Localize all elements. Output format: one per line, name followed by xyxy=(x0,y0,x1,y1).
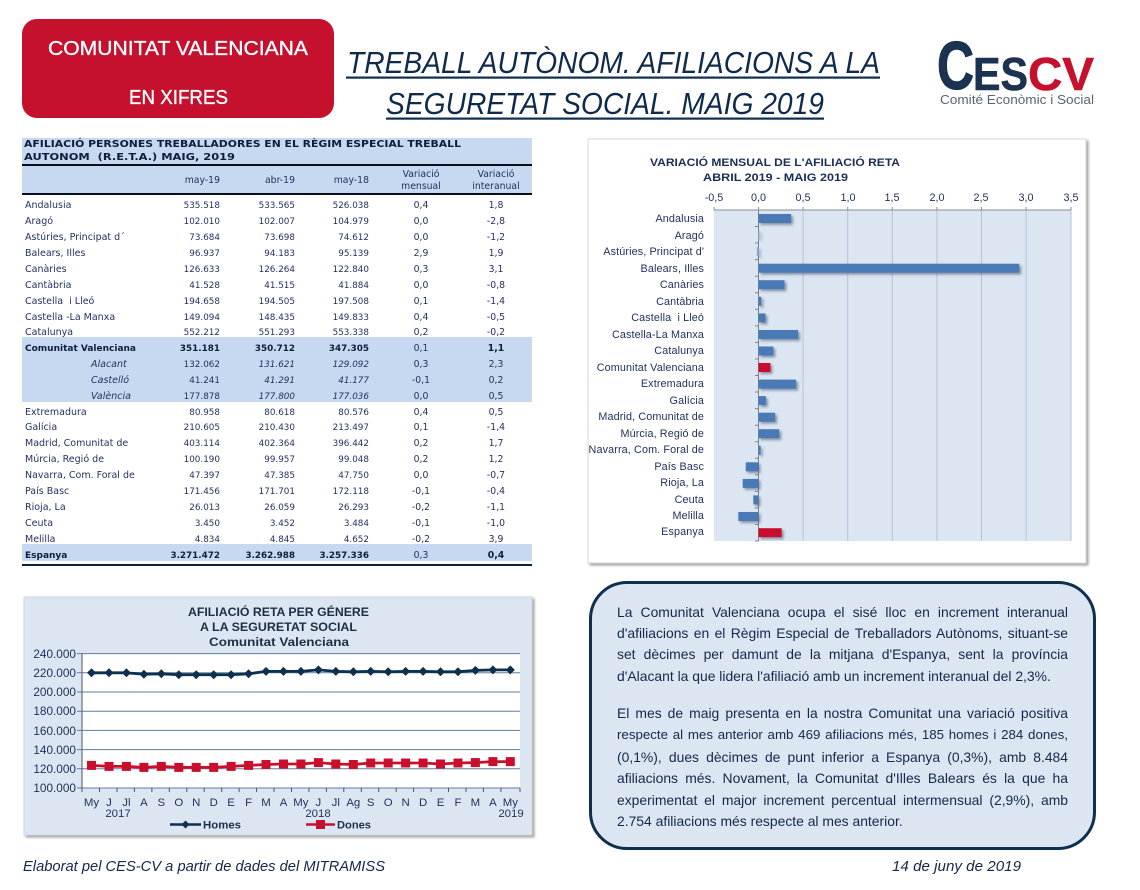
category labels: Madrid, Comunitat de xyxy=(598,411,704,423)
table rows: 171.701 xyxy=(259,487,295,497)
table rows: Aragó xyxy=(25,216,53,227)
table rows: 1,8 xyxy=(489,200,503,211)
x axis labels: Jl xyxy=(122,797,131,809)
highlight band: Espanya xyxy=(22,544,532,561)
table rows: 74.612 xyxy=(338,233,369,243)
text block: paragraph 1: set dècimes per damunt de la mitjana d'Espanya, sent la província xyxy=(617,646,1068,662)
header badge: Comunitat Valenciana en xifres xyxy=(22,19,334,118)
table rows: Ceuta xyxy=(25,518,53,529)
logo: CES-CV: CV xyxy=(1028,48,1094,100)
table rows: 0,0 xyxy=(414,280,428,291)
table rows: 210.430 xyxy=(259,423,295,433)
table rows: 2,3 xyxy=(489,359,503,370)
table rows: 0,0 xyxy=(414,216,428,227)
logo: CES-CV: ES xyxy=(973,48,1028,100)
x axis labels: Ag xyxy=(346,797,360,809)
line chart title xyxy=(188,606,369,649)
table rows: Cantàbria xyxy=(25,280,71,291)
table rows: 403.114 xyxy=(184,439,220,449)
line series: Dones xyxy=(92,762,510,767)
table rows: -1,4 xyxy=(487,296,505,307)
table rows: 194.505 xyxy=(259,297,295,307)
value axis: 2,5 xyxy=(973,192,989,204)
table rows: -0,2 xyxy=(412,502,430,513)
table rows: 3.262.988 xyxy=(245,551,295,561)
table rows: 1,7 xyxy=(489,438,503,449)
table rows: 197.508 xyxy=(333,297,369,307)
table rows: 149.094 xyxy=(184,313,220,323)
table rows: 99.048 xyxy=(338,455,369,465)
table rows: 0,4 xyxy=(488,550,505,561)
x axis labels: E xyxy=(437,797,445,809)
x axis labels: 2018 xyxy=(305,808,331,820)
table rows: 553.338 xyxy=(333,328,369,338)
x axis labels: A xyxy=(280,797,288,809)
table rows: 0,2 xyxy=(414,454,428,465)
value axis xyxy=(705,192,1079,204)
table rows: 210.605 xyxy=(184,423,220,433)
x axis labels: N xyxy=(401,797,410,809)
table rows: 0,3 xyxy=(414,359,428,370)
logo: CES-CV: C xyxy=(937,28,974,104)
table rows: 41.241 xyxy=(189,376,220,386)
table rows: Espanya xyxy=(25,551,67,561)
x axis labels: O xyxy=(174,797,183,809)
table header: may-19 xyxy=(185,175,220,186)
table rows: 3.452 xyxy=(270,519,295,529)
bar chart title: ABRIL 2019 - MAIG 2019 xyxy=(703,172,848,184)
table rows: -0,8 xyxy=(487,280,505,291)
text block: paragraph 1: d'Alacant la que lidera l'afiliació amb un increment interanual del 2,3%. xyxy=(617,668,1051,684)
table rows: 0,0 xyxy=(414,391,428,402)
value axis: 0,5 xyxy=(795,192,811,204)
table rows: 172.118 xyxy=(333,487,369,497)
table rows: 194.658 xyxy=(184,297,220,307)
legend: Dones xyxy=(337,820,371,832)
category labels: Catalunya xyxy=(654,345,704,357)
category labels: Espanya xyxy=(661,526,704,538)
x axis labels: M xyxy=(471,797,480,809)
y axis labels: 240.000 xyxy=(33,647,76,661)
table rows: Catalunya xyxy=(25,327,73,338)
table rows: València xyxy=(91,391,131,402)
x axis labels: F xyxy=(245,797,252,809)
table rows: Castelló xyxy=(91,375,129,386)
x axis labels xyxy=(84,797,524,820)
table rows: 100.190 xyxy=(184,455,220,465)
x axis labels: My xyxy=(293,797,309,809)
x axis labels: M xyxy=(261,797,271,809)
table title: AFILIACIÓ PERSONES TREBALLADORES EN EL RÈGIM ESPECIAL TREBALL xyxy=(24,137,461,150)
table header: abr-19 xyxy=(265,175,295,186)
table rows: 171.456 xyxy=(184,487,220,497)
x axis labels: S xyxy=(367,797,375,809)
table rows: 533.565 xyxy=(259,201,295,211)
table rows: 4.652 xyxy=(344,535,369,545)
table rows: Navarra, Com. Foral de xyxy=(25,470,135,481)
x axis labels: F xyxy=(455,797,462,809)
table rows: Extremadura xyxy=(25,407,87,418)
x axis labels: N xyxy=(192,797,200,809)
table rows: 102.007 xyxy=(259,217,295,227)
table rows: 99.957 xyxy=(264,455,295,465)
x axis labels: My xyxy=(84,797,99,809)
header badge: Comunitat Valenciana en xifres: EN XIFRES xyxy=(129,87,228,109)
x axis labels: A xyxy=(140,797,148,809)
table rows: 0,0 xyxy=(414,470,428,481)
value axis: 0,0 xyxy=(751,192,766,204)
table rows: 102.010 xyxy=(184,217,220,227)
table rows: 0,1 xyxy=(414,422,428,433)
table rows: 26.059 xyxy=(264,503,295,513)
title xyxy=(346,45,880,121)
category labels: Balears, Illes xyxy=(640,263,704,275)
table rows: -0,5 xyxy=(487,312,505,323)
table rows: Alacant xyxy=(90,359,128,370)
table rows: 122.840 xyxy=(333,265,369,275)
table title: AUTONOM (R.E.T.A.) MAIG, 2019 xyxy=(24,152,235,163)
x axis labels: E xyxy=(227,797,235,809)
line series: Homes xyxy=(92,670,510,675)
table rows xyxy=(25,200,505,561)
table rows: 347.305 xyxy=(329,344,369,354)
table rows: 26.013 xyxy=(189,503,220,513)
text block: paragraph 2: (0,1%), dues dècimes de punt inferior a Espanya (0,3%), amb 8.484 xyxy=(617,749,1068,765)
table rows: -2,8 xyxy=(487,216,505,227)
value axis: -0,5 xyxy=(705,192,723,204)
category labels: Ceuta xyxy=(675,494,704,506)
table rows: Castella i Lleó xyxy=(25,296,95,307)
legend: Homes xyxy=(203,820,241,832)
table rows: 177.878 xyxy=(184,392,220,402)
x axis labels: S xyxy=(157,797,165,809)
table rows: 0,2 xyxy=(414,327,428,338)
header badge: Comunitat Valenciana en xifres: COMUNITAT VALENCIANA xyxy=(48,38,309,60)
title: SEGURETAT SOCIAL. MAIG 2019 xyxy=(386,86,824,121)
x axis labels: A xyxy=(489,797,497,809)
table rows: 552.212 xyxy=(184,328,220,338)
table rows: -1,0 xyxy=(487,518,505,529)
x axis labels: D xyxy=(419,797,427,809)
x axis labels: D xyxy=(210,797,218,809)
table rows: 3.484 xyxy=(344,519,369,529)
category labels: Múrcia, Regió de xyxy=(620,428,704,440)
table rows: 396.442 xyxy=(333,439,369,449)
table rows: 73.698 xyxy=(264,233,295,243)
table rows: -1,2 xyxy=(487,232,505,243)
category labels: Extremadura xyxy=(641,378,704,390)
table rows: 1,1 xyxy=(488,343,504,354)
category labels: Castella i Lleó xyxy=(631,312,704,324)
category labels: Comunitat Valenciana xyxy=(597,362,704,374)
bars xyxy=(738,214,1019,537)
table rows: 177.800 xyxy=(259,392,295,402)
table header: Variació xyxy=(478,169,515,180)
table title xyxy=(22,137,532,164)
text block: paragraph 2: respecte al mes anterior amb 469 afiliacions més, 185 homes i 284 dones, xyxy=(617,727,1068,742)
table rows: Múrcia, Regió de xyxy=(25,454,104,465)
plot area xyxy=(77,654,520,792)
table rows: 0,2 xyxy=(414,438,428,449)
table rows: -0,7 xyxy=(487,470,505,481)
table rows: Balears, Illes xyxy=(25,248,85,259)
table rows: -0,2 xyxy=(487,327,505,338)
category labels: Andalusia xyxy=(655,213,704,225)
table rows: Rioja, La xyxy=(25,502,66,513)
y axis labels: 180.000 xyxy=(33,704,76,718)
table rows: 3.271.472 xyxy=(170,551,220,561)
table rows: -0,1 xyxy=(412,486,430,497)
table rows: 47.385 xyxy=(264,471,295,481)
table rows: 0,4 xyxy=(414,200,428,211)
table rows: -0,1 xyxy=(412,518,430,529)
table rows: 0,2 xyxy=(489,375,503,386)
table: afiliació RETA per comunitats xyxy=(22,137,532,566)
table rows: 149.833 xyxy=(333,313,369,323)
table rows: 41.528 xyxy=(189,281,220,291)
table rows: -1,4 xyxy=(487,422,505,433)
table rows: 0,5 xyxy=(489,407,503,418)
category labels: Melilla xyxy=(673,510,704,522)
line chart title: Comunitat Valenciana xyxy=(209,637,350,649)
table header xyxy=(22,164,532,195)
category labels: Canàries xyxy=(660,279,704,291)
table rows: 350.712 xyxy=(255,344,295,354)
table rows: 41.884 xyxy=(338,281,369,291)
value axis: 3,0 xyxy=(1018,192,1034,204)
table rows: 213.497 xyxy=(333,423,369,433)
line chart title: A LA SEGURETAT SOCIAL xyxy=(200,622,357,634)
table rows: 126.633 xyxy=(184,265,220,275)
value axis: 1,5 xyxy=(884,192,900,204)
table rows: Madrid, Comunitat de xyxy=(25,438,128,449)
table rows: -0,2 xyxy=(412,534,430,545)
table rows: 80.958 xyxy=(189,408,220,418)
table rows: 73.684 xyxy=(189,233,220,243)
table rows: País Basc xyxy=(25,486,69,497)
table header: Variació xyxy=(403,169,440,180)
table rows: 3.450 xyxy=(195,519,220,529)
table rows: 80.618 xyxy=(264,408,295,418)
table rows: 41.515 xyxy=(264,281,295,291)
table rows: 1,9 xyxy=(489,248,503,259)
category labels: Castella-La Manxa xyxy=(612,329,704,341)
table rows: 0,1 xyxy=(414,296,428,307)
category labels: Astúries, Principat d' xyxy=(603,246,704,258)
table rows: 94.183 xyxy=(264,249,295,259)
table rows: Comunitat Valenciana xyxy=(25,344,136,354)
table rows: Galícia xyxy=(25,422,57,433)
text block: paragraph 2: El mes de maig presenta en la nostra Comunitat una variació positiva xyxy=(617,705,1068,721)
table rows: 104.979 xyxy=(333,217,369,227)
text block: paragraph 1 xyxy=(617,604,1068,684)
x axis labels: My xyxy=(503,797,518,809)
text block: paragraph 2: experimentat el major increment percentual intermensual (2,9%), amb xyxy=(617,792,1068,808)
value axis: 3,5 xyxy=(1063,192,1079,204)
table rows: 129.092 xyxy=(333,360,369,370)
table rows: 3,9 xyxy=(489,534,503,545)
table rows: 3,1 xyxy=(489,264,503,275)
table rows: Melilla xyxy=(25,534,55,545)
table rows: 131.621 xyxy=(259,360,295,370)
line chart title: AFILIACIÓ RETA PER GÉNERE xyxy=(188,606,369,619)
table rows: Astúries, Principat d´ xyxy=(25,232,125,243)
category labels: Cantàbria xyxy=(656,296,704,308)
table rows: 4.834 xyxy=(195,535,220,545)
table rows: 0,5 xyxy=(489,391,503,402)
x axis labels: O xyxy=(384,797,393,809)
value axis: 1,0 xyxy=(840,192,856,204)
category labels: País Basc xyxy=(654,461,704,473)
table rows: 26.293 xyxy=(338,503,369,513)
table rows: 0,4 xyxy=(414,312,428,323)
table rows: -0,4 xyxy=(487,486,505,497)
category labels: Rioja, La xyxy=(660,477,704,489)
logo: CES-CV: Comité Econòmic i Social xyxy=(940,92,1094,107)
table rows: -1,1 xyxy=(487,502,505,513)
table rows: 0,3 xyxy=(414,264,428,275)
x axis labels: J xyxy=(316,797,321,809)
table rows: 47.397 xyxy=(189,471,220,481)
table rows: 4.845 xyxy=(270,535,295,545)
table rows: 80.576 xyxy=(338,408,369,418)
legend xyxy=(170,820,371,832)
category labels xyxy=(589,213,704,538)
table rows: 41.291 xyxy=(264,376,295,386)
panel: bar chart variació mensual xyxy=(588,139,1086,563)
table rows: Canàries xyxy=(25,264,67,275)
bar chart title xyxy=(650,156,900,184)
table rows: Andalusia xyxy=(25,200,71,211)
y axis labels: 120.000 xyxy=(33,762,76,776)
y axis labels xyxy=(33,647,76,795)
table rows: 95.139 xyxy=(338,249,369,259)
table rows: 41.177 xyxy=(338,376,369,386)
y axis labels: 220.000 xyxy=(33,666,76,680)
table rows: 3.257.336 xyxy=(319,551,369,561)
table rows: 126.264 xyxy=(259,265,295,275)
table rows: 132.062 xyxy=(184,360,220,370)
table rows: 2,9 xyxy=(414,248,428,259)
x axis labels: 2017 xyxy=(105,808,131,820)
table rows: 0,4 xyxy=(414,407,428,418)
table rows: 0,3 xyxy=(414,550,428,561)
text block: paragraph 1: d'afiliacions en el Règim Especial de Treballadors Autònoms, situant-se xyxy=(617,625,1068,641)
panel: line chart afiliació per gènere xyxy=(24,597,532,835)
table rows: 148.435 xyxy=(259,313,295,323)
footer: source: Elaborat pel CES-CV a partir de dades del MITRAMISS xyxy=(23,859,385,875)
table rows: Castella -La Manxa xyxy=(25,312,115,323)
table rows: 0,1 xyxy=(414,343,428,354)
text block: paragraph 2 xyxy=(617,705,1068,829)
y axis labels: 200.000 xyxy=(33,685,76,699)
text panel: summary xyxy=(589,581,1096,850)
category labels: Navarra, Com. Foral de xyxy=(589,444,704,456)
table rows: 177.036 xyxy=(333,392,369,402)
x axis labels: J xyxy=(106,797,112,809)
table rows: 402.364 xyxy=(259,439,295,449)
text block: paragraph 2: 2.754 afiliacions més respecte al mes anterior. xyxy=(617,813,903,829)
y axis labels: 100.000 xyxy=(33,781,76,795)
title: TREBALL AUTÒNOM. AFILIACIONS A LA xyxy=(347,45,880,80)
highlight band: Comunitat Valenciana xyxy=(22,337,532,402)
y axis labels: 140.000 xyxy=(33,743,76,757)
table rows: 551.293 xyxy=(259,328,295,338)
table rows: 96.937 xyxy=(189,249,220,259)
category labels: Aragó xyxy=(675,230,704,242)
table rows: 0,0 xyxy=(414,232,428,243)
footer: date: 14 de juny de 2019 xyxy=(892,859,1021,875)
text block: paragraph 2: afiliacions més. Novament, la Comunitat d'Illes Balears és la que ha xyxy=(617,770,1068,786)
table rows: 351.181 xyxy=(180,344,220,354)
text block: paragraph 1: La Comunitat Valenciana ocupa el sisé lloc en increment interanual xyxy=(617,604,1068,620)
y axis labels: 160.000 xyxy=(33,724,76,738)
x axis labels: Jl xyxy=(332,797,340,809)
logo: CES-CV xyxy=(937,28,1094,107)
table header: may-18 xyxy=(334,175,369,186)
table header: interanual xyxy=(472,181,520,192)
x axis labels: 2019 xyxy=(498,808,524,820)
table rows: -0,1 xyxy=(412,375,430,386)
category labels: Galícia xyxy=(670,395,704,407)
value axis: 2,0 xyxy=(929,192,945,204)
plot background and gridlines xyxy=(714,207,1071,541)
table rows: 1,2 xyxy=(489,454,503,465)
table rows: 535.518 xyxy=(184,201,220,211)
table header: mensual xyxy=(401,181,441,192)
table rows: 526.038 xyxy=(333,201,369,211)
bar chart title: VARIACIÓ MENSUAL DE L'AFILIACIÓ RETA xyxy=(650,156,900,169)
table rows: 47.750 xyxy=(338,471,369,481)
